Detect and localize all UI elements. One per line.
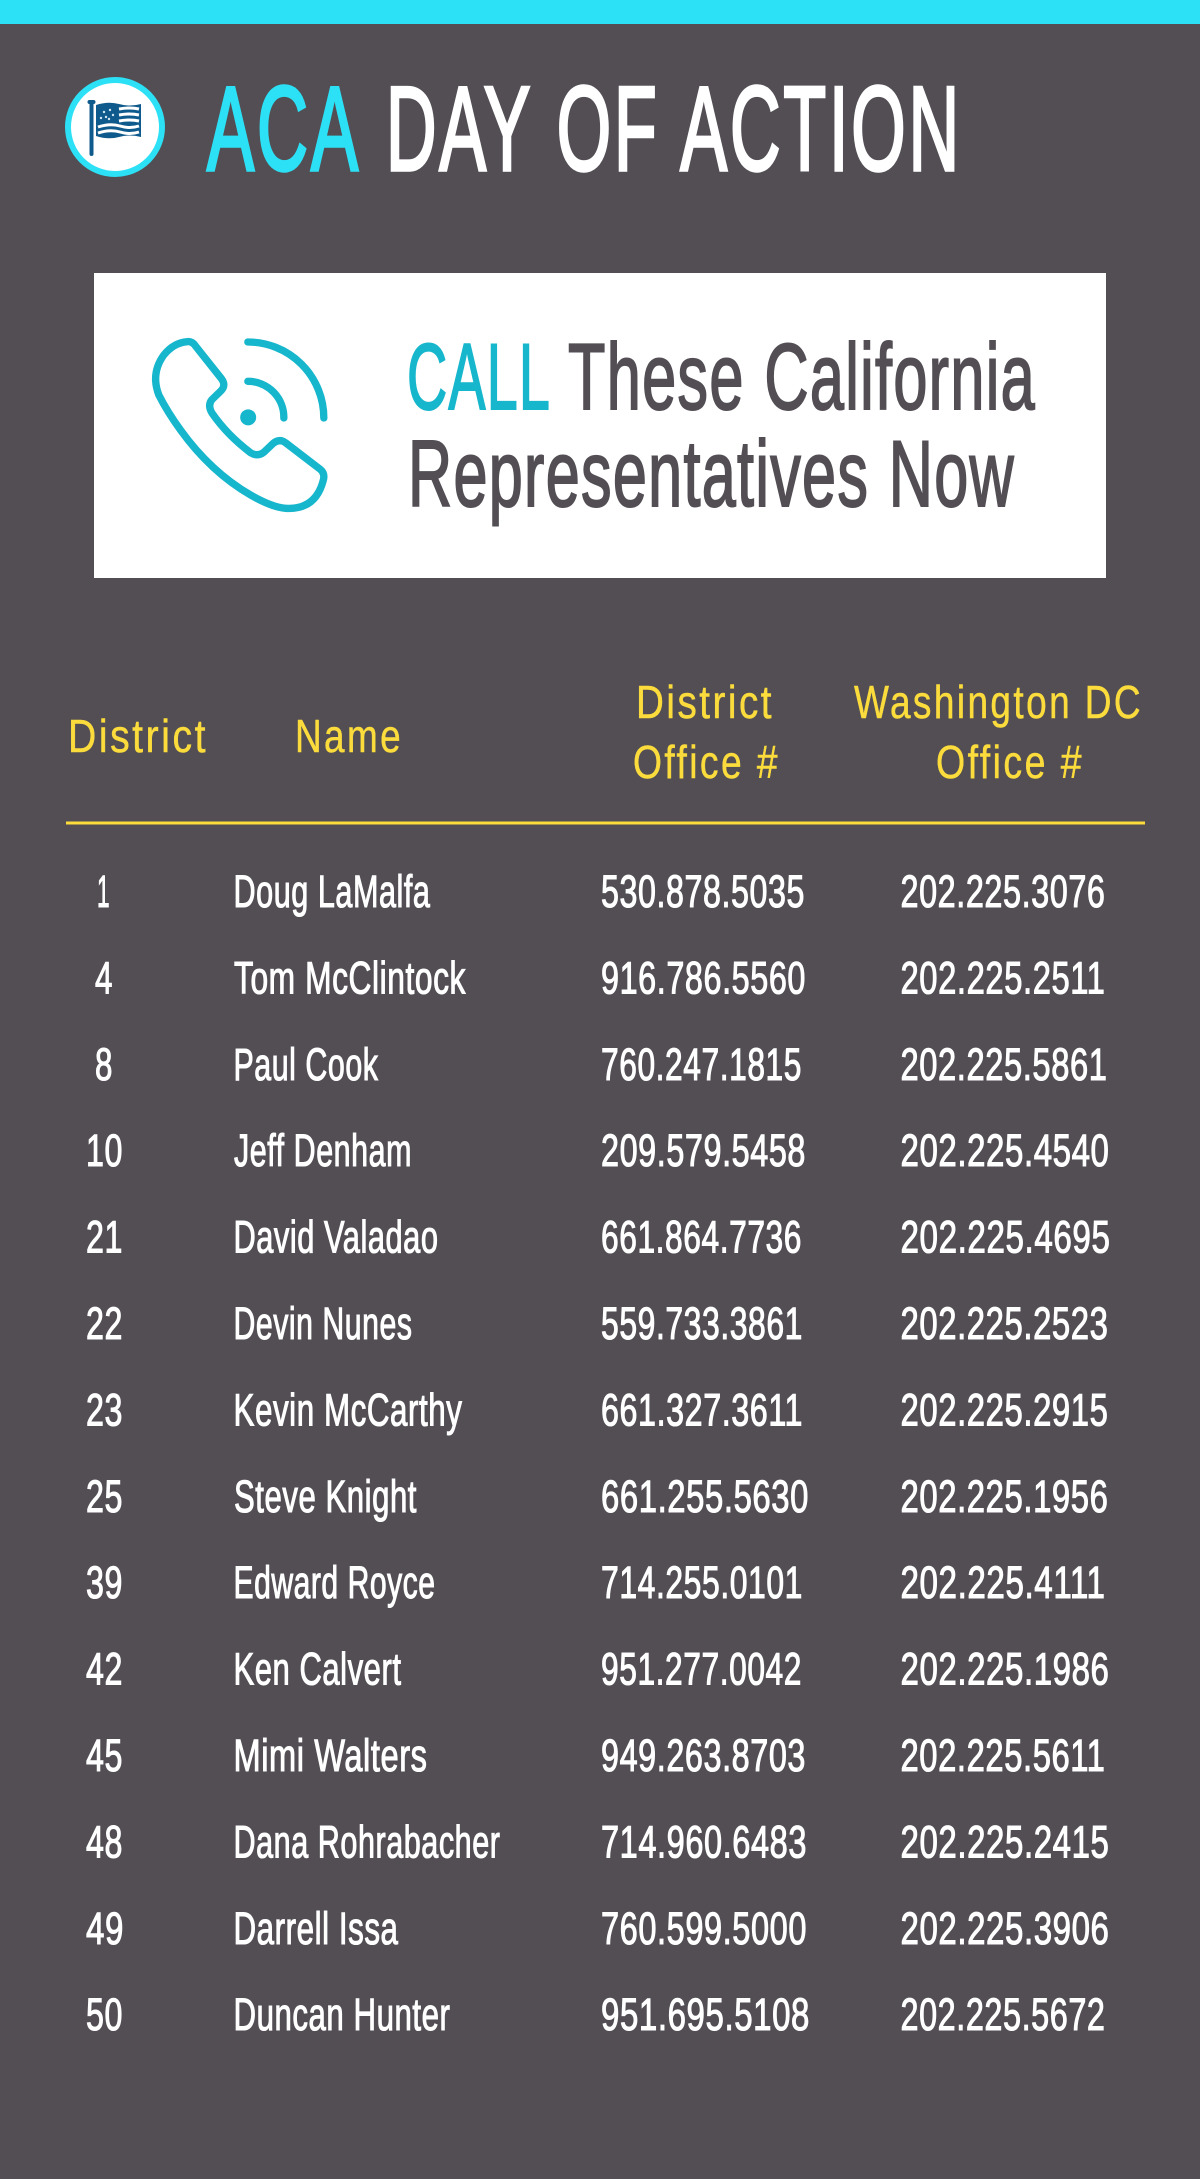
row: district 22 — [86, 1298, 1108, 1349]
row: district 4: Tom McClintock — [234, 952, 466, 1003]
row: district 45 — [86, 1730, 1106, 1781]
row: district 8: 8 — [95, 1039, 113, 1090]
table header: Office # — [936, 736, 1084, 788]
row: district 23: 661.327.3611 — [601, 1384, 803, 1435]
row: district 49: 49 — [86, 1903, 124, 1954]
row: district 49 — [86, 1903, 1110, 1954]
row: district 4: 916.786.5560 — [601, 952, 806, 1003]
row: district 1: 530.878.5035 — [601, 866, 805, 917]
row: district 45: 45 — [86, 1730, 123, 1781]
row: district 8: Paul Cook — [234, 1039, 378, 1090]
row: district 22: 22 — [86, 1298, 123, 1349]
row: district 8 — [95, 1039, 1108, 1090]
row: district 23: Kevin McCarthy — [234, 1384, 462, 1435]
row: district 45: Mimi Walters — [234, 1730, 428, 1781]
row: district 21: 661.864.7736 — [601, 1212, 802, 1263]
row: district 22: 559.733.3861 — [601, 1298, 803, 1349]
row: district 45: 202.225.5611 — [900, 1730, 1106, 1781]
row: district 39: 714.255.0101 — [601, 1557, 803, 1608]
row: district 23 — [86, 1384, 1108, 1435]
row: district 50: Duncan Hunter — [234, 1989, 450, 2040]
row: district 50: 202.225.5672 — [900, 1989, 1106, 2040]
row: district 10: 202.225.4540 — [900, 1125, 1110, 1176]
row: district 49: Darrell Issa — [234, 1903, 399, 1954]
icon: american flag badge — [68, 80, 162, 174]
row: district 10: Jeff Denham — [234, 1125, 412, 1176]
row: district 25 — [86, 1471, 1108, 1522]
row: district 25: 202.225.1956 — [900, 1471, 1108, 1522]
row: district 48: 202.225.2415 — [900, 1816, 1110, 1867]
row: district 39: 202.225.4111 — [900, 1557, 1106, 1608]
row: district 25: Steve Knight — [234, 1471, 417, 1522]
row: district 23: 202.225.2915 — [900, 1384, 1108, 1435]
table header: District — [68, 710, 208, 762]
row: district 39: 39 — [86, 1557, 123, 1608]
row: district 23: 23 — [86, 1384, 123, 1435]
panel: call to action — [94, 273, 1106, 578]
row: district 42: 42 — [86, 1644, 123, 1695]
heading: call these california representatives now — [407, 324, 1036, 526]
row: district 22: 202.225.2523 — [900, 1298, 1108, 1349]
title — [207, 62, 962, 196]
row: district 22: Devin Nunes — [234, 1298, 412, 1349]
row: district 10: 10 — [86, 1125, 123, 1176]
title: ACA — [207, 62, 361, 196]
row: district 21: 202.225.4695 — [900, 1212, 1110, 1263]
top accent bar — [0, 0, 1200, 24]
row: district 49: 202.225.3906 — [900, 1903, 1110, 1954]
row: district 4 — [95, 952, 1106, 1003]
row: district 10 — [86, 1125, 1110, 1176]
table header: Name — [295, 710, 403, 762]
table header: District — [636, 676, 774, 728]
row: district 49: 760.599.5000 — [601, 1903, 807, 1954]
icon: phone with signal waves — [156, 342, 324, 508]
row: district 21: 21 — [86, 1212, 123, 1263]
row: district 8: 202.225.5861 — [900, 1039, 1108, 1090]
row: district 48: 48 — [86, 1816, 123, 1867]
row: district 48: 714.960.6483 — [601, 1816, 807, 1867]
row: district 21 — [86, 1212, 1110, 1263]
table header — [68, 676, 1143, 788]
row: district 50: 951.695.5108 — [601, 1989, 810, 2040]
row: district 25: 661.255.5630 — [601, 1471, 809, 1522]
row: district 1: 1 — [97, 866, 110, 917]
row: district 42: 951.277.0042 — [601, 1644, 802, 1695]
row: district 42: 202.225.1986 — [900, 1644, 1110, 1695]
row: district 4: 202.225.2511 — [900, 952, 1106, 1003]
row: district 42: Ken Calvert — [234, 1644, 402, 1695]
row: district 50: 50 — [86, 1989, 123, 2040]
row: district 1: Doug LaMalfa — [234, 866, 431, 917]
row: district 48: Dana Rohrabacher — [234, 1816, 500, 1867]
row: district 4: 4 — [95, 952, 113, 1003]
row: district 21: David Valadao — [234, 1212, 438, 1263]
row: district 25: 25 — [86, 1471, 123, 1522]
row: district 45: 949.263.8703 — [601, 1730, 806, 1781]
heading: call these california representatives now: CALL — [407, 324, 551, 429]
row: district 1 — [97, 866, 1106, 917]
row: district 50 — [86, 1989, 1106, 2040]
row: district 42 — [86, 1644, 1110, 1695]
row: district 39 — [86, 1557, 1106, 1608]
row: district 8: 760.247.1815 — [601, 1039, 802, 1090]
row: district 1: 202.225.3076 — [900, 866, 1106, 917]
table header: Office # — [633, 736, 780, 788]
row: district 48 — [86, 1816, 1110, 1867]
table: california representatives — [66, 676, 1145, 2040]
row: district 39: Edward Royce — [234, 1557, 436, 1608]
row: district 10: 209.579.5458 — [601, 1125, 806, 1176]
